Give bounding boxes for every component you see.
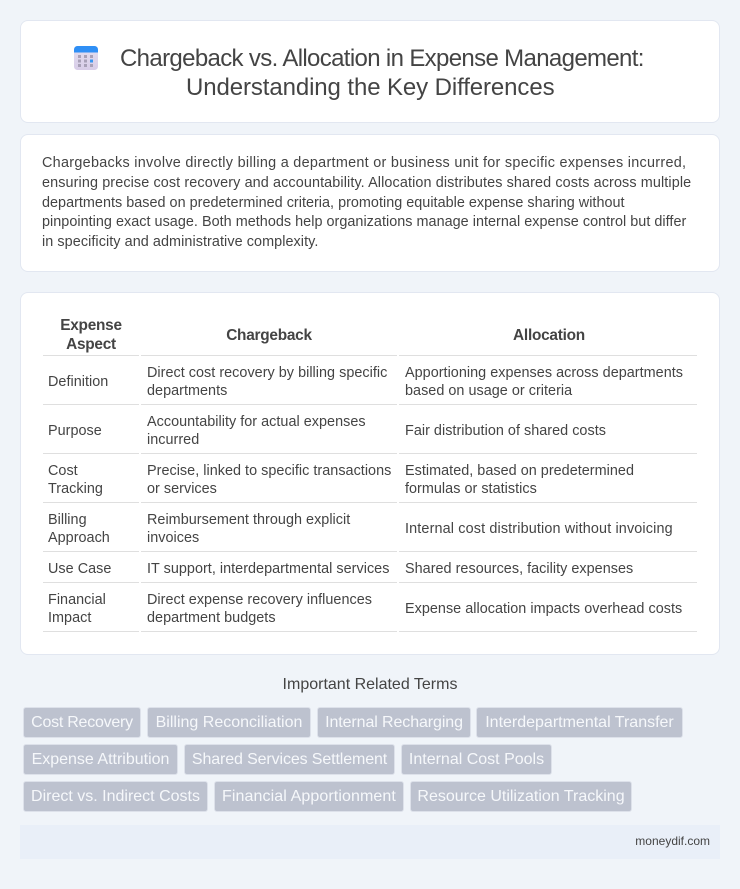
row: Cost Tracking: Estimated, based on predetermined <box>405 463 634 479</box>
table header <box>60 317 585 353</box>
table header: Allocation <box>513 327 585 344</box>
row: Cost Tracking: Precise, linked to specific transactions <box>147 463 391 479</box>
panel: comparison table <box>20 292 720 655</box>
icon: calendar <box>74 46 98 70</box>
row: Use Case: Shared resources, facility expenses <box>405 561 633 577</box>
text block: summary: in specificity and administrative complexity. <box>42 234 318 250</box>
row: Billing Approach: Approach <box>48 530 110 546</box>
tags: related terms: Cost Recovery <box>31 714 133 731</box>
row: Billing Approach <box>48 512 673 546</box>
tags: related terms: Internal Cost Pools <box>409 751 544 768</box>
row: Definition: Definition <box>48 374 108 390</box>
row: Purpose <box>48 414 606 448</box>
footer: source: moneydif.com <box>635 834 710 848</box>
row: Cost Tracking: or services <box>147 481 217 497</box>
text block: summary: pinpointing exact usage. Both methods help organizations manage internal expense control but differ <box>42 214 686 230</box>
text block: summary: departments based on predetermined criteria, promoting equitable expense sharing without <box>42 195 625 211</box>
title: Chargeback vs. Allocation in Expense Management: <box>120 45 644 72</box>
text block: summary <box>42 155 691 250</box>
row: Billing Approach: invoices <box>147 530 199 546</box>
row: Definition: Apportioning expenses across departments <box>405 365 683 381</box>
panel: summary paragraph <box>20 134 720 272</box>
table header: Expense <box>60 317 122 334</box>
row: Financial Impact <box>48 592 682 626</box>
row: Billing Approach: Billing <box>48 512 87 528</box>
row: Financial Impact: Expense allocation impacts overhead costs <box>405 601 682 617</box>
text block: summary: ensuring precise cost recovery and accountability. Allocation distributes shared costs across multiple <box>42 175 691 191</box>
tags: related terms: Direct vs. Indirect Costs <box>31 788 200 805</box>
row: Use Case: Use Case <box>48 561 111 577</box>
table: chargeback vs allocation <box>43 317 697 632</box>
row: Use Case <box>48 561 633 577</box>
row: Billing Approach: Reimbursement through explicit <box>147 512 350 528</box>
row: Use Case: IT support, interdepartmental services <box>147 561 389 577</box>
row: Definition: departments <box>147 383 227 399</box>
tags: related terms: Financial Apportionment <box>222 788 396 805</box>
tags: related terms: Interdepartmental Transfer <box>485 714 674 731</box>
title <box>120 45 644 101</box>
row: Financial Impact: Direct expense recovery influences <box>147 592 372 608</box>
footer bar <box>20 825 720 859</box>
row: Financial Impact: department budgets <box>147 610 276 626</box>
row: Financial Impact: Impact <box>48 610 91 626</box>
tags: related terms: Expense Attribution <box>32 751 169 768</box>
row: Cost Tracking: Tracking <box>48 481 103 497</box>
row: Definition: Direct cost recovery by billing specific <box>147 365 387 381</box>
tags: related terms: Internal Recharging <box>325 714 463 731</box>
heading: related terms: Important Related Terms <box>283 676 457 693</box>
row: Purpose: Fair distribution of shared costs <box>405 423 606 439</box>
row: Definition: based on usage or criteria <box>405 383 572 399</box>
table header: Aspect <box>66 336 116 353</box>
table header: Chargeback <box>226 327 312 344</box>
tags: related terms: Shared Services Settlement <box>192 751 387 768</box>
row: Purpose: Accountability for actual expenses <box>147 414 366 430</box>
tags: related terms: Billing Reconciliation <box>156 714 302 731</box>
row: Purpose: Purpose <box>48 423 102 439</box>
row: Financial Impact: Financial <box>48 592 106 608</box>
row: Billing Approach: Internal cost distribution without invoicing <box>405 521 673 537</box>
row: Cost Tracking: formulas or statistics <box>405 481 537 497</box>
title: Understanding the Key Differences <box>186 74 554 101</box>
text block: summary: Chargebacks involve directly billing a department or business unit for specific expenses incurred, <box>42 155 686 171</box>
panel: title card <box>20 20 720 123</box>
row: Definition <box>48 365 683 399</box>
row: Cost Tracking: Cost <box>48 463 78 479</box>
row: Purpose: incurred <box>147 432 199 448</box>
row: Cost Tracking <box>48 463 634 497</box>
tags: related terms <box>23 707 683 812</box>
tags: related terms: Resource Utilization Tracking <box>417 788 625 805</box>
